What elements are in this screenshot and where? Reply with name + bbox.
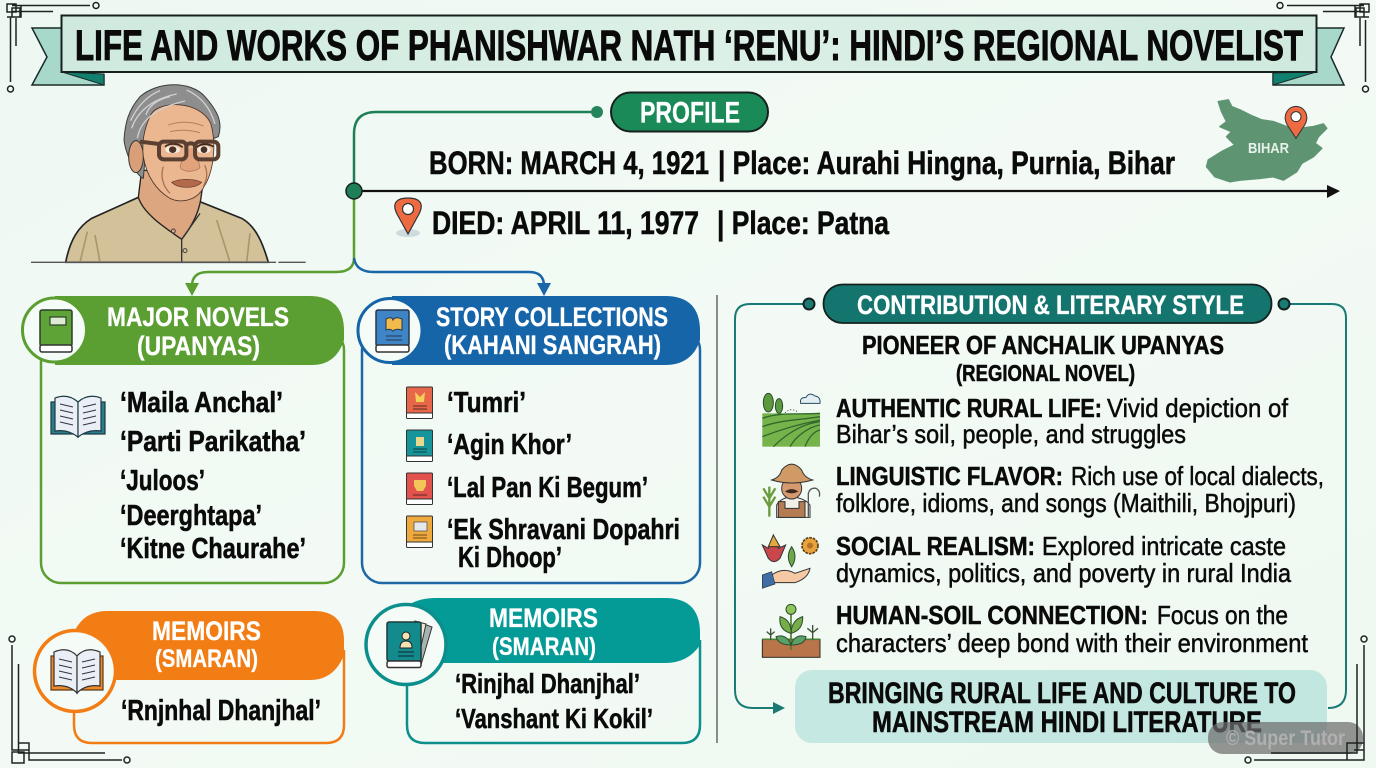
heading pill: CONTRIBUTION & LITERARY STYLE	[857, 290, 1244, 320]
panel: memoirs teal: (SMARAN)	[492, 633, 596, 661]
profile start dot	[591, 106, 603, 118]
heading: MAJOR NOVELS	[107, 302, 289, 332]
map of Bihar	[1207, 100, 1327, 182]
icon: teal memoir book	[387, 621, 432, 668]
callout: MAINSTREAM HINDI LITERATURE	[872, 706, 1262, 739]
text: linguistic flavor	[836, 461, 1324, 518]
birth details: | Place: Aurahi Hingna, Purnia, Bihar	[718, 145, 1175, 181]
text: human soil connection: characters’ deep bond with their environment	[836, 628, 1309, 658]
icon: location pin	[395, 198, 421, 237]
icon: social realism	[762, 535, 818, 588]
novels list: ‘Maila Anchal’	[120, 387, 283, 419]
corner ornament: top right	[1277, 2, 1369, 92]
novels list	[120, 387, 306, 565]
callout	[795, 670, 1327, 743]
icon: map pin	[1285, 106, 1307, 138]
watermark: © Super Tutor	[1226, 727, 1345, 750]
text: authentic rural life	[836, 393, 1289, 449]
icon: farmer	[763, 464, 820, 517]
memoir titles: ‘Rinjhal Dhanjhal’	[455, 668, 640, 699]
memoir titles: ‘Vanshant Ki Kokil’	[455, 703, 653, 734]
heading: MEMOIRS	[489, 603, 598, 633]
text: human soil connection: HUMAN-SOIL CONNECTION:	[836, 600, 1148, 630]
panel: memoirs orange: (SMARAN)	[155, 645, 258, 673]
timeline arrow	[346, 183, 1340, 199]
icon: teal book	[406, 430, 432, 462]
icon: green book	[40, 310, 72, 352]
text: linguistic flavor: Rich use of local dialects,	[1071, 461, 1324, 491]
text: linguistic flavor: LINGUISTIC FLAVOR:	[836, 461, 1063, 491]
panel: story collections	[358, 296, 700, 583]
heading pill	[824, 284, 1272, 323]
frame connector	[735, 298, 1346, 714]
icon: soil and plant	[762, 604, 820, 657]
panel: major novels: (UPANYAS)	[137, 331, 260, 361]
text: authentic rural life: Bihar’s soil, people, and struggles	[836, 419, 1186, 449]
profile heading: PROFILE	[640, 96, 740, 130]
death details: DIED: APRIL 11, 1977	[432, 205, 699, 241]
heading: MEMOIRS	[152, 616, 261, 646]
novels list: ‘Deerghtapa’	[120, 500, 262, 532]
story: Ek Shravani Dopahri Ki Dhoop	[447, 514, 680, 574]
panel: story collections: (KAHANI SANGRAH)	[444, 330, 661, 360]
novels list: ‘Kitne Chaurahe’	[120, 533, 306, 565]
story: Ek Shravani Dopahri Ki Dhoop: Ki Dhoop’	[458, 542, 562, 574]
birth details	[429, 145, 1175, 181]
panel: major novels	[22, 296, 344, 583]
corner ornament: top left	[7, 2, 99, 92]
heading: STORY COLLECTIONS	[436, 302, 668, 332]
icon: farmland	[762, 393, 820, 447]
corner ornament: bottom right	[1245, 636, 1367, 763]
story: Lal Pan Ki Begum: ‘Lal Pan Ki Begum’	[447, 472, 648, 504]
map label: BIHAR	[1248, 140, 1289, 157]
icon: orange open book	[51, 650, 103, 693]
title banner	[32, 16, 1344, 85]
text: authentic rural life: AUTHENTIC RURAL LIFE:	[836, 393, 1102, 423]
connector lines from profile	[185, 112, 591, 296]
text: human soil connection: Focus on the	[1157, 600, 1288, 630]
birth details: BORN: MARCH 4, 1921	[429, 145, 709, 181]
corner ornament: bottom left	[9, 636, 130, 763]
text: social realism: SOCIAL REALISM:	[836, 531, 1035, 561]
text: authentic rural life: Vivid depiction of	[1107, 393, 1289, 423]
icon: blue book	[376, 310, 409, 352]
memoir title: ‘Rnjnhal Dhanjhal’	[121, 695, 321, 727]
story: Ek Shravani Dopahri Ki Dhoop: ‘Ek Shravani Dopahri	[447, 514, 680, 546]
icon: red book	[406, 387, 432, 418]
novels list: ‘Parti Parikatha’	[120, 426, 306, 458]
subheading	[862, 330, 1224, 386]
text: linguistic flavor: folklore, idioms, and songs (Maithili, Bhojpuri)	[836, 488, 1296, 518]
story: Agin Khor: ‘Agin Khor’	[447, 429, 572, 461]
text: social realism	[836, 531, 1291, 588]
watermark	[1208, 722, 1363, 754]
text: social realism: Explored intricate caste	[1042, 531, 1286, 561]
subheading: (REGIONAL NOVEL)	[956, 360, 1135, 386]
text: human soil connection	[836, 600, 1309, 658]
memoir titles	[455, 668, 653, 734]
panel: memoirs orange	[34, 611, 344, 743]
death details: | Place: Patna	[717, 205, 889, 241]
text: social realism: dynamics, politics, and poverty in rural India	[836, 558, 1291, 588]
icon: yellow book	[406, 516, 432, 548]
portrait of Renu	[31, 85, 306, 262]
panel: memoirs teal	[366, 598, 700, 743]
story: Tumri: ‘Tumri’	[447, 387, 526, 419]
icon: crimson book	[406, 473, 432, 504]
icon: open book	[51, 396, 105, 437]
subheading: PIONEER OF ANCHALIK UPANYAS	[862, 330, 1224, 360]
novels list: ‘Juloos’	[120, 465, 205, 497]
panel: contribution and literary style	[735, 284, 1346, 743]
profile pill	[611, 92, 768, 132]
